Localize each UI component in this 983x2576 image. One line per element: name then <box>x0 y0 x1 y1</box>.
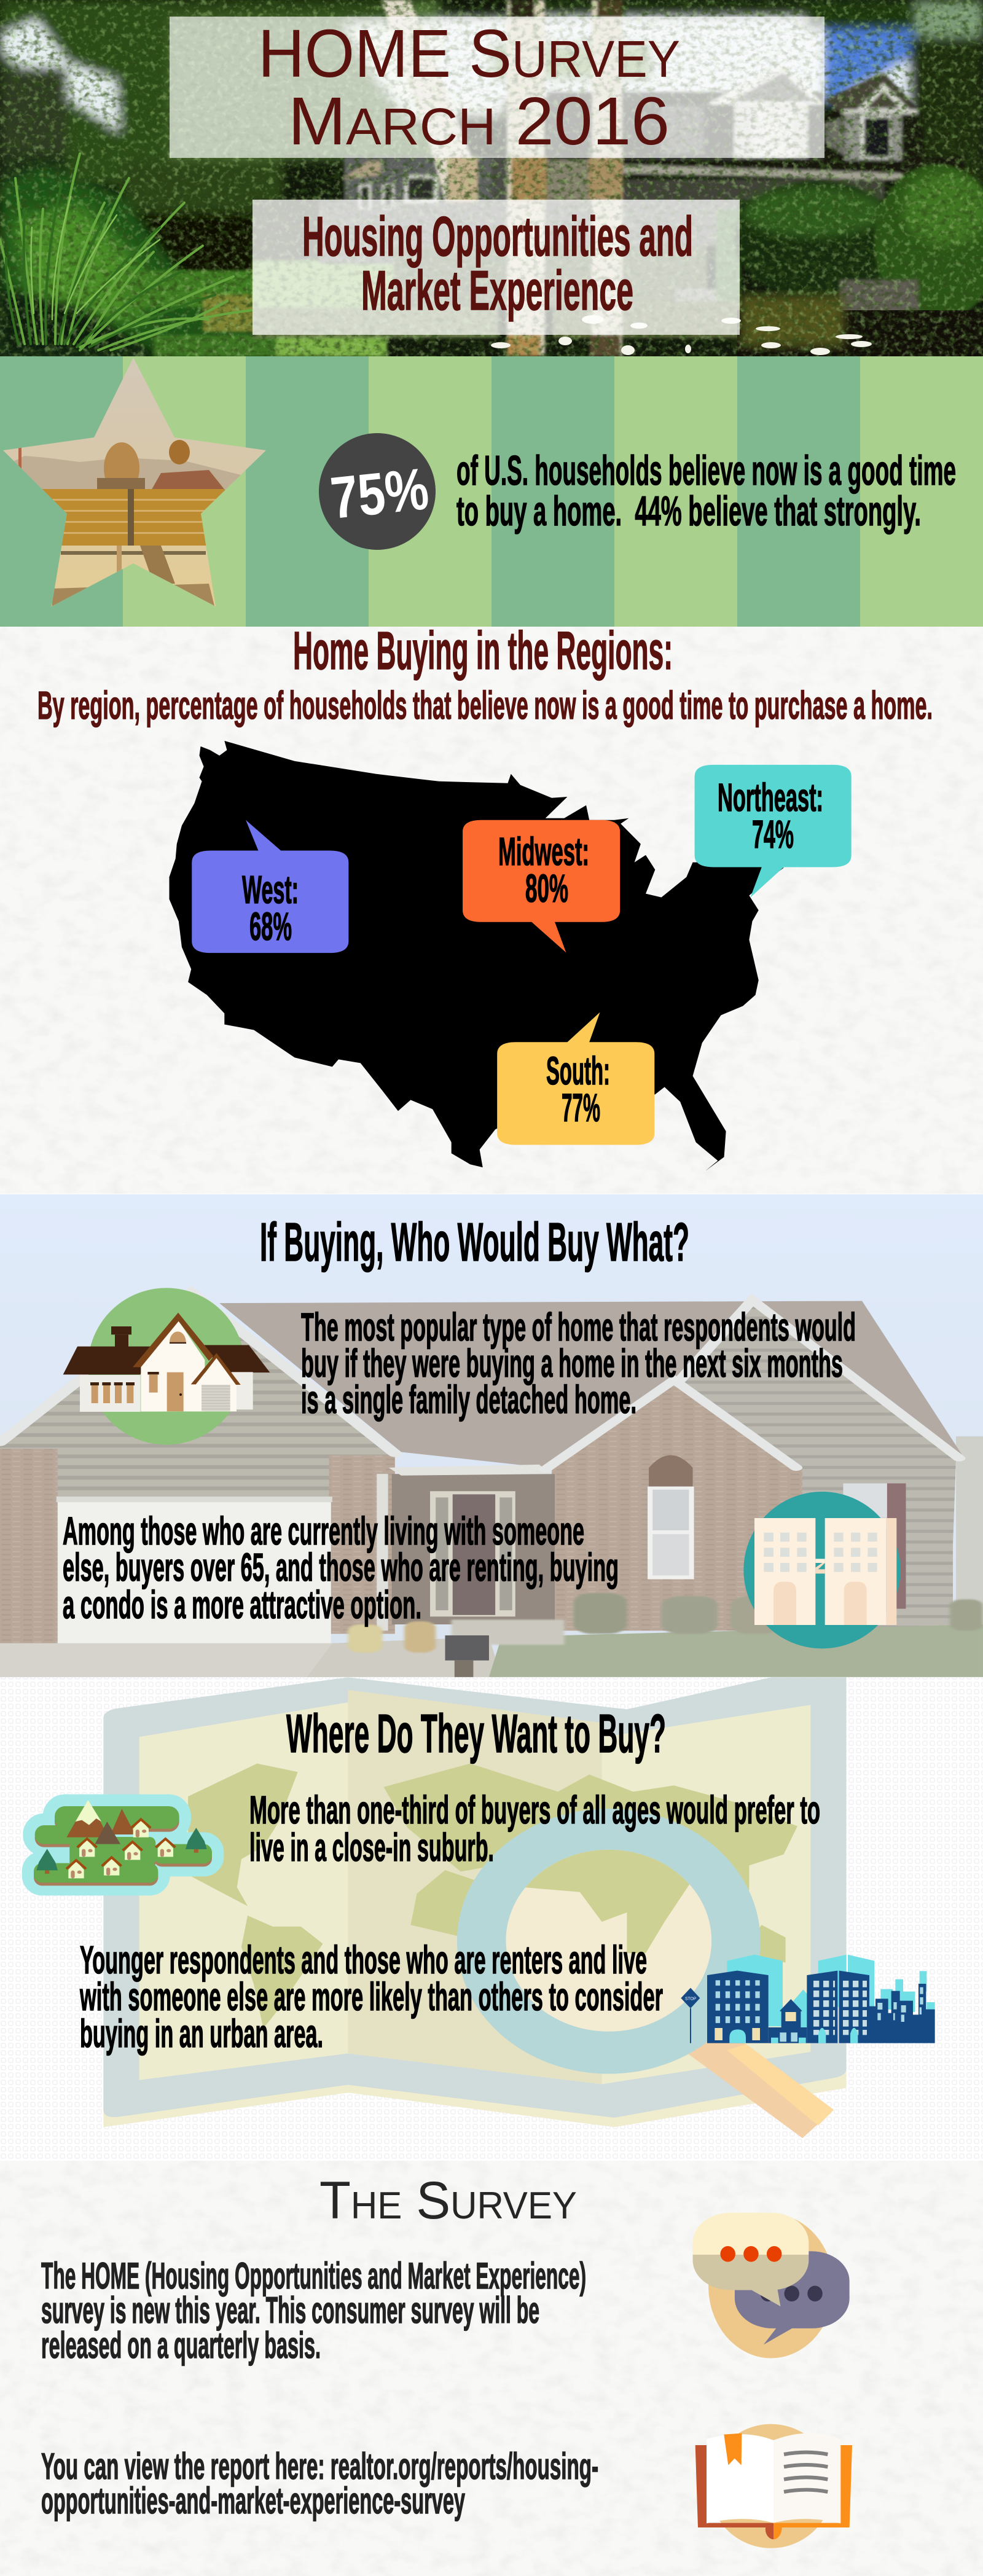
callout: West: 68% <box>249 904 292 949</box>
icon: suburban village <box>34 1800 212 1885</box>
callout: Midwest <box>463 820 620 953</box>
callout: Midwest: 80% <box>525 866 568 910</box>
text: report link: opportunities-and-market-experience-survey <box>41 2480 465 2521</box>
title line 2: MARCH 2016 <box>288 84 670 159</box>
panel: hero photo header <box>0 0 983 357</box>
callout: West: West: <box>242 867 299 912</box>
text: single family: is a single family detached home. <box>301 1377 636 1422</box>
callout: Northeast: 74% <box>752 812 794 856</box>
title line 1: HOME SURVEY <box>258 16 680 92</box>
icon: open book <box>695 2424 852 2548</box>
US map silhouette <box>170 741 783 1171</box>
text: about the survey: released on a quarterly basis. <box>41 2325 321 2366</box>
background illustration: folded map with magnifier <box>103 1677 847 2138</box>
text: report link <box>41 2446 598 2521</box>
statistic text <box>456 447 956 534</box>
icon: detached house <box>63 1288 270 1445</box>
title panel <box>170 16 824 159</box>
panel: 75% statistic band <box>0 356 983 627</box>
panel: the survey <box>0 2161 983 2576</box>
text: urban <box>79 1938 663 2056</box>
subtitle line 2: Market Experience <box>361 260 633 322</box>
icon: city skyline with stop sign <box>681 1955 935 2043</box>
callout: South: 77% <box>562 1086 600 1130</box>
callout: Midwest: Midwest: <box>498 829 589 874</box>
text: suburb <box>249 1788 820 1869</box>
text: single family <box>301 1305 856 1422</box>
text: urban: buying in an urban area. <box>80 2011 323 2056</box>
callout: Northeast <box>695 765 852 898</box>
subtitle panel <box>253 200 740 335</box>
text: about the survey: survey is new this year. This consumer survey will be <box>41 2290 539 2331</box>
icon: condo buildings <box>743 1492 901 1648</box>
75% badge: 75% <box>327 456 432 531</box>
text: condo <box>63 1509 619 1627</box>
icon: chat bubbles <box>693 2213 850 2358</box>
callout: Northeast: Northeast: <box>718 775 823 820</box>
callout: West <box>192 820 348 953</box>
panel: if buying, who would buy what <box>0 1194 983 1677</box>
panel: home buying in the regions <box>0 621 983 1194</box>
callout: South: South: <box>546 1049 610 1093</box>
text: suburb: live in a close-in suburb. <box>249 1825 494 1869</box>
background photo of suburban house <box>0 1194 983 1677</box>
star with couple on bench photo <box>0 356 270 608</box>
text: condo: a condo is a more attractive option. <box>63 1583 421 1627</box>
icon: city skyline with stop sign: STOP <box>685 1995 696 2001</box>
75% badge <box>319 433 436 550</box>
hero photo of house and garden <box>0 0 983 357</box>
callout: South <box>497 1012 654 1145</box>
text: about the survey <box>41 2255 586 2366</box>
heading: THE SURVEY <box>319 2171 577 2230</box>
panel: where do they want to buy <box>0 1677 983 2163</box>
